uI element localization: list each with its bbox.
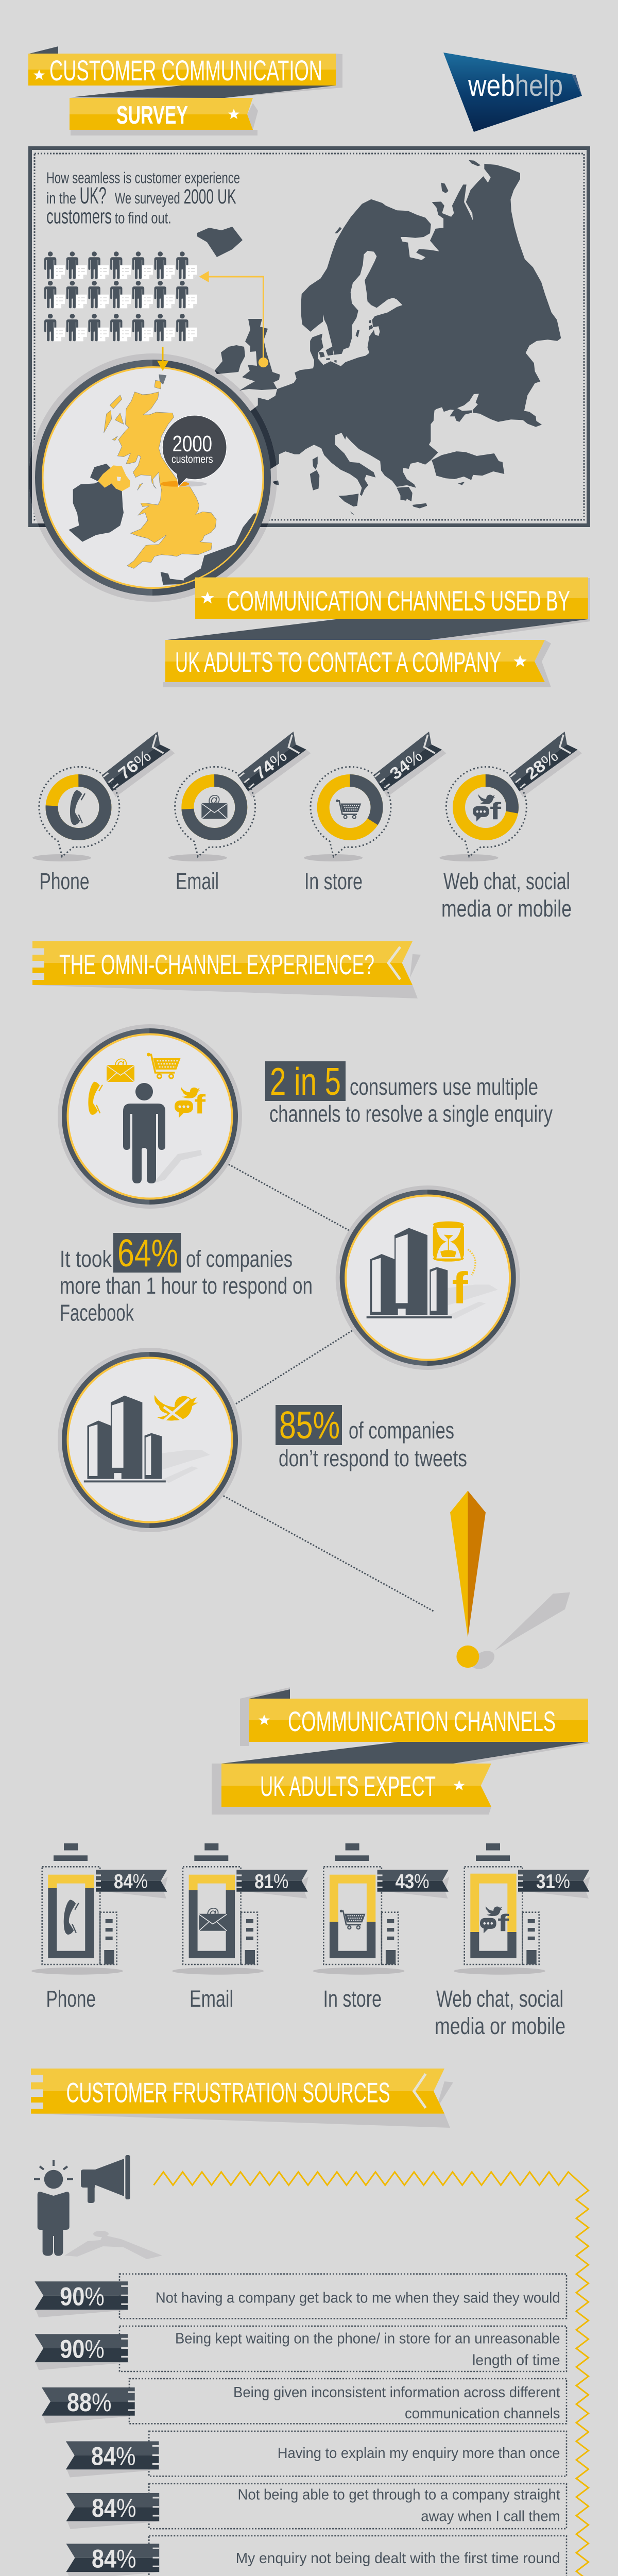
channel labels: [39, 868, 572, 922]
stat: 64% facebook: of companies: [186, 1246, 293, 1272]
continental europe in magnifier: [161, 513, 257, 585]
channel pin: email 74%: [168, 732, 311, 861]
stat: 85% tweets: of companies: [349, 1417, 454, 1444]
icon: social: f: [194, 1090, 206, 1120]
channel labels: Email: [176, 868, 219, 894]
meter labels: Email: [190, 1986, 233, 2012]
meter: phone 84%: [31, 1843, 168, 1975]
meter: email 81%: @: [206, 1905, 220, 1921]
stat: 85% tweets: 85%: [279, 1403, 340, 1447]
frustration row 2: 90%: [35, 2326, 566, 2371]
uk magnifier circle: [29, 353, 277, 602]
circle: consumer with channels: [58, 1024, 242, 1209]
stat: 85% tweets: [276, 1403, 467, 1471]
stat: 64% facebook: It took: [60, 1246, 112, 1272]
title text line 1: CUSTOMER COMMUNICATION: [49, 54, 322, 87]
frustration row 1: 90%: 90%: [60, 2282, 105, 2311]
meter: in store 43%: 43%: [396, 1871, 430, 1893]
frustration row 5: 84%: 84%: [92, 2494, 136, 2522]
channel pin: email 74%: 74%: [250, 747, 290, 783]
channel pin: in store 34%: [304, 732, 447, 861]
intro text: UK?: [80, 182, 107, 209]
ireland: [68, 464, 124, 542]
icon: email: @: [114, 1056, 128, 1072]
channel labels: In store: [304, 868, 363, 894]
stat: 2 in 5: 2 in 5: [270, 1060, 341, 1103]
icon: person with megaphone: [34, 2155, 162, 2259]
icon: person: [123, 1083, 165, 1183]
icon: email: [107, 1056, 134, 1082]
channel pin: phone 76%: 76%: [115, 747, 154, 783]
frustration row 2: 90%: 90%: [60, 2335, 105, 2364]
banner: the omni-channel experience: [32, 941, 421, 998]
intro text: 2000 UK: [184, 185, 236, 208]
zigzag border: [35, 2172, 589, 2576]
callout: 2000 customers: 2000: [173, 431, 212, 456]
frustration row 6: 84%: [66, 2536, 566, 2576]
pictogram: surveyed customers: [44, 251, 197, 341]
meter: email 81%: 81%: [254, 1871, 288, 1893]
logo: webhelp: webhelp: [468, 69, 563, 103]
icon: phone: [88, 1082, 102, 1115]
intro text: customers: [46, 205, 112, 228]
title banner: customer communication survey: [28, 46, 342, 135]
callout shadow: [161, 481, 207, 487]
callout: 2000 customers: customers: [171, 452, 213, 465]
banner text line 2: UK ADULTS EXPECT: [260, 1770, 436, 1802]
frustration row 5: 84%: Not being able to get through to a company straight: [238, 2487, 560, 2503]
stat: 85% tweets: don’t respond to tweets: [279, 1445, 467, 1471]
meter: web chat, social, mobile 31%: f: [497, 1909, 509, 1936]
banner: customer frustration sources: [31, 2069, 453, 2128]
icon: exclamation mark: [450, 1491, 570, 1673]
meter: web chat, social, mobile 31%: [454, 1843, 590, 1975]
logo: webhelp: [443, 53, 582, 132]
frustration row 6: 84%: My enquiry not being dealt with the first time round: [236, 2550, 560, 2567]
channel pin: phone 76%: [32, 732, 175, 861]
frustration row 6: 84%: 84%: [92, 2544, 136, 2573]
frustration row 3: 88%: communication channels: [405, 2405, 560, 2422]
icon: crossed twitter bird: [154, 1395, 198, 1422]
frustration row 4: 84%: Having to explain my enquiry more than once: [278, 2445, 560, 2462]
icon: facebook f: f: [452, 1263, 468, 1313]
frustration row 4: 84%: 84%: [91, 2442, 136, 2471]
intro text: [46, 169, 240, 228]
stat: 64% facebook: more than 1 hour to respond on: [60, 1273, 313, 1299]
intro text: to find out.: [115, 209, 171, 227]
banner: communication channels used by uk adults: [163, 578, 590, 687]
northern ireland: [98, 465, 130, 491]
banner: the omni-channel experience: THE OMNI-CHANNEL EXPERIENCE?: [59, 948, 374, 980]
stat: 2 in 5: [265, 1060, 553, 1127]
meter: email 81%: [172, 1843, 308, 1975]
stat: 64% facebook: Facebook: [60, 1299, 134, 1326]
callout: 2000 customers: [162, 415, 227, 487]
meter labels: media or mobile: [435, 2013, 565, 2039]
channel pin: in store 34%: 34%: [386, 747, 426, 783]
banner: customer frustration sources: CUSTOMER FRUSTRATION SOURCES: [66, 2076, 390, 2108]
frustration row 1: 90%: Not having a company get back to me when they said they would: [156, 2290, 560, 2306]
frustration row 5: 84%: away when I call them: [421, 2509, 560, 2525]
meter: web chat, social, mobile 31%: 31%: [536, 1871, 570, 1893]
circle: company with crossed-out twitter: [58, 1348, 242, 1532]
map panel frame: [30, 148, 588, 526]
frustration row 3: 88%: [42, 2379, 566, 2424]
great britain: [104, 380, 216, 568]
channel pin: web chat, social, mobile 28%: f: [490, 798, 502, 824]
channel labels: Web chat, social: [443, 868, 570, 894]
stat: 64% facebook: 64%: [117, 1231, 178, 1275]
channel labels: Phone: [39, 868, 90, 894]
frustration row 2: 90%: length of time: [472, 2352, 560, 2368]
stat: 2 in 5: consumers use multiple: [350, 1074, 538, 1100]
europe map: [197, 160, 561, 515]
title text line 2: SURVEY: [116, 101, 188, 129]
frustration row 5: 84%: [66, 2484, 566, 2529]
meter labels: [46, 1986, 565, 2039]
frustration row 2: 90%: Being kept waiting on the phone/ in store for an unreasonable: [175, 2330, 560, 2347]
meter: phone 84%: 84%: [114, 1871, 148, 1893]
meter labels: Web chat, social: [436, 1986, 563, 2012]
stat: 64% facebook: [60, 1231, 313, 1326]
channel labels: media or mobile: [441, 895, 572, 922]
channel pin: email 74%: @: [208, 793, 221, 807]
arrow: uk to pictogram: [199, 271, 268, 367]
arrow: pictogram to uk circle: [157, 347, 169, 371]
channel pin: web chat, social, mobile 28%: 28%: [522, 747, 561, 783]
frustration row 3: 88%: 88%: [67, 2388, 111, 2417]
intro text: in the: [46, 189, 76, 207]
icon: hourglass: [433, 1222, 464, 1262]
intro text: How seamless is customer experience: [46, 169, 240, 187]
banner: communication channels uk adults expect: [212, 1687, 590, 1815]
icon: social: [175, 1087, 206, 1120]
frustration row 3: 88%: Being given inconsistent information across different: [233, 2384, 560, 2401]
circle: company with hourglass and facebook: [336, 1185, 520, 1370]
dotted connectors: [221, 1163, 435, 1612]
meter labels: Phone: [46, 1986, 96, 2012]
frustration row 4: 84%: [66, 2431, 566, 2477]
icon: cart: [147, 1053, 180, 1078]
frustration row 1: 90%: [35, 2274, 566, 2318]
meter labels: In store: [323, 1986, 382, 2012]
meter: in store 43%: [313, 1843, 449, 1975]
intro text: We surveyed: [115, 189, 180, 207]
channel pin: web chat, social, mobile 28%: [440, 732, 582, 861]
